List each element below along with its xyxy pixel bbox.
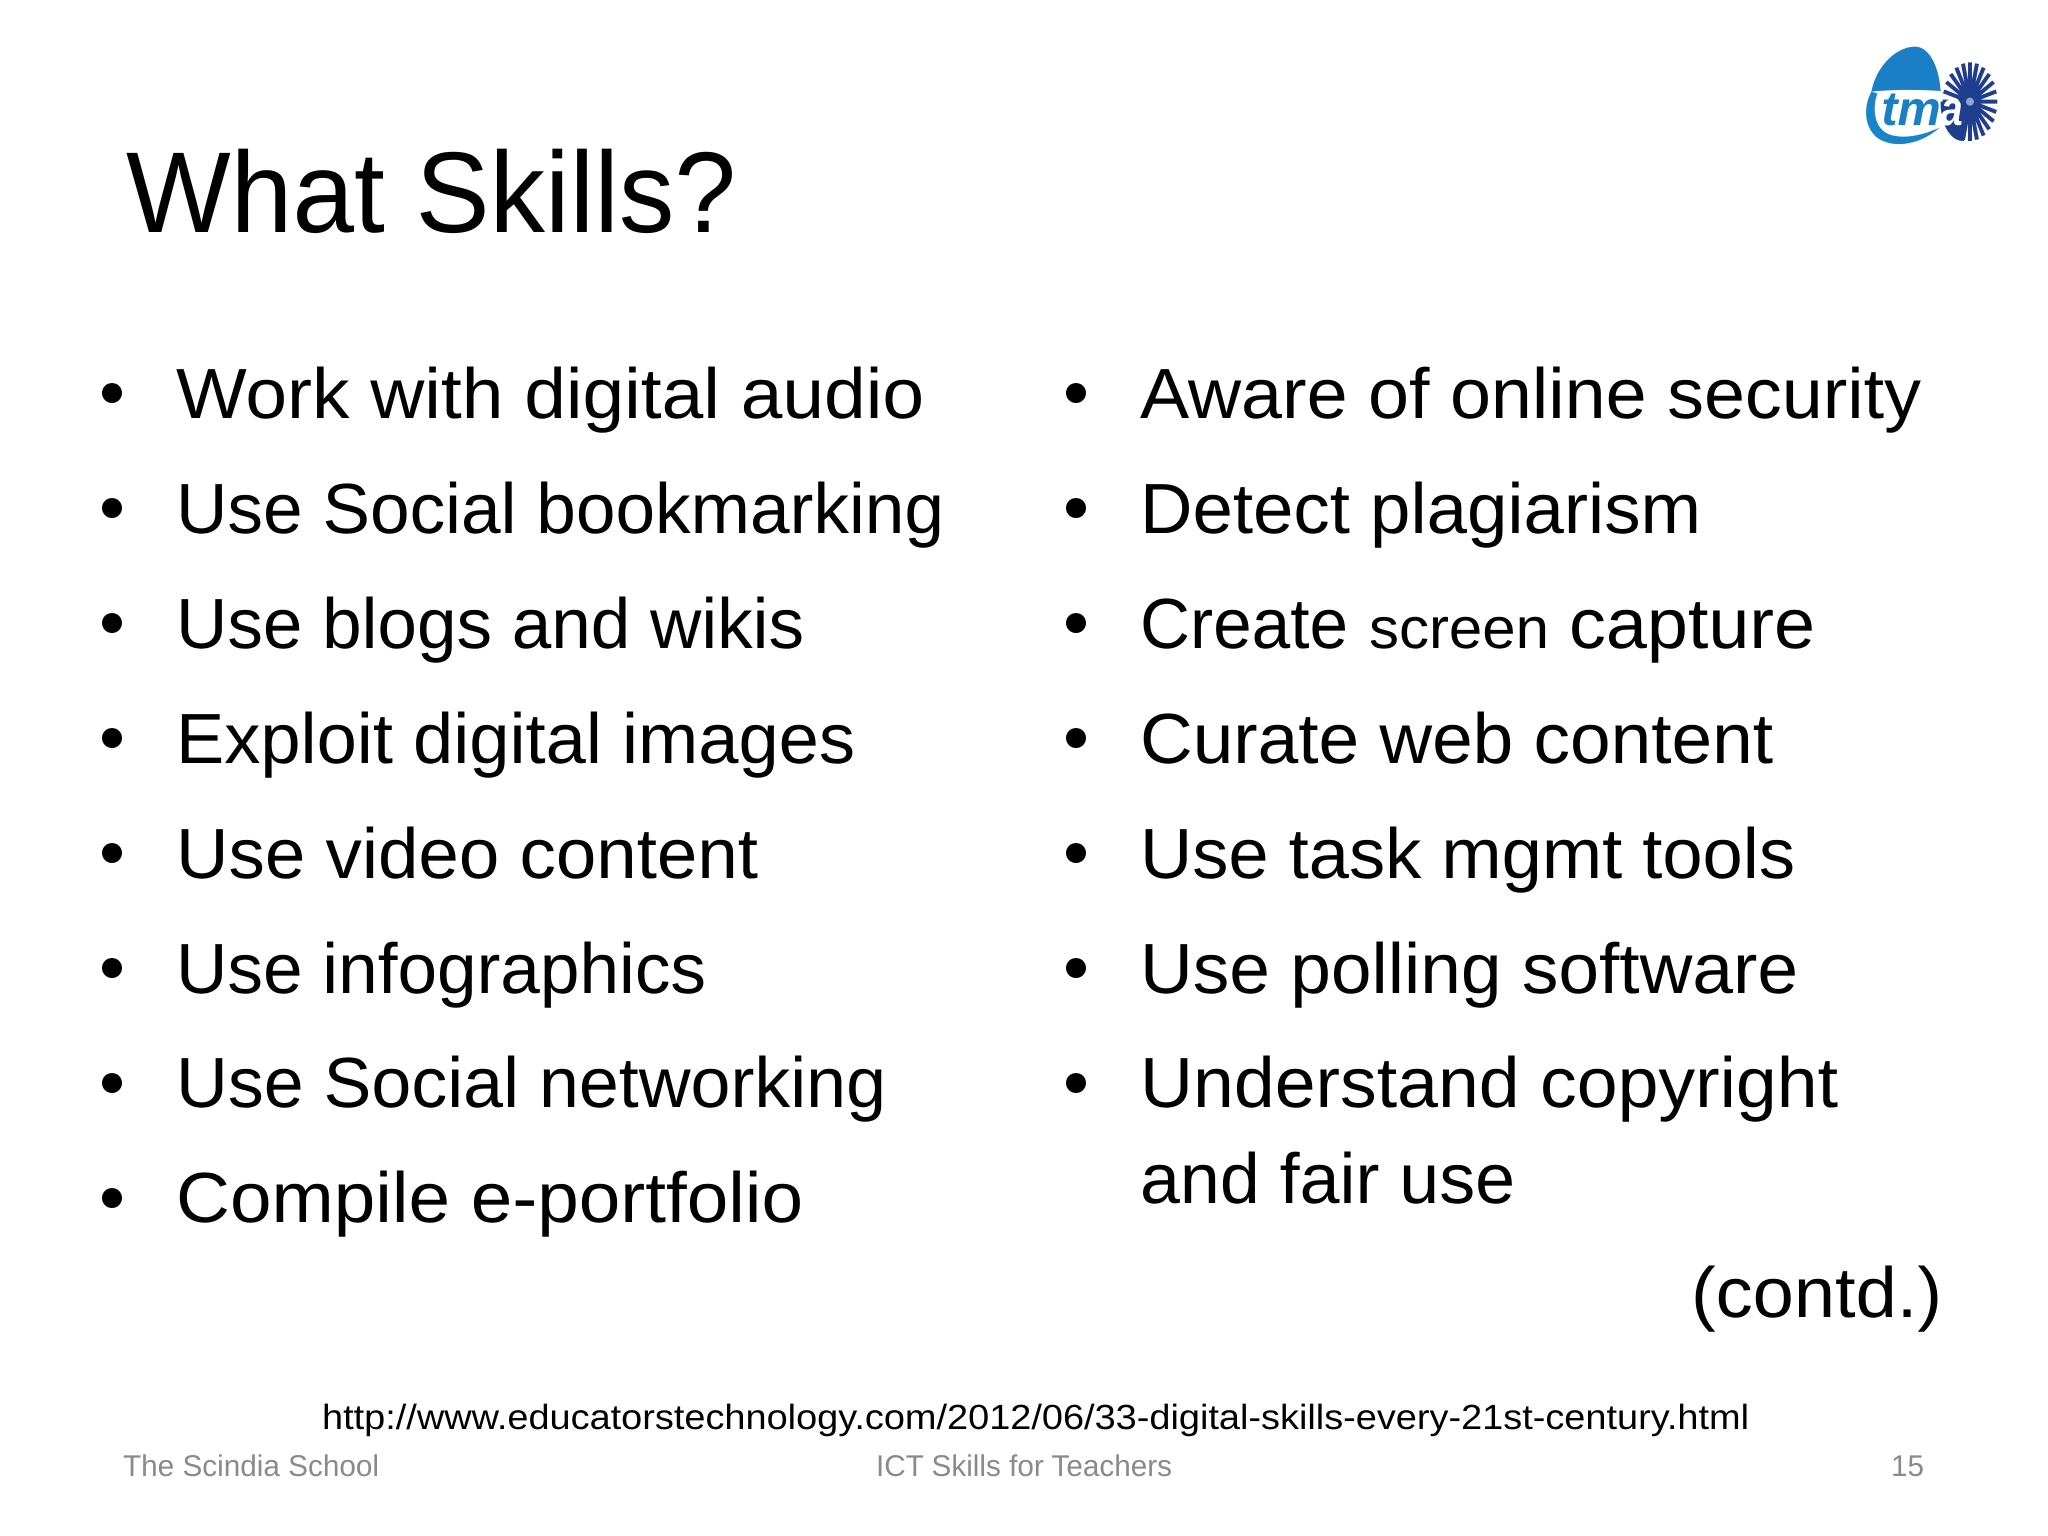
- skill: Detect plagiarism: Detect plagiarism: [1140, 470, 1701, 549]
- source URL: http://www.educatorstechnology.com/2012/06/33-digital-skills-every-21st-century.html: [322, 1398, 1749, 1437]
- skill: Use infographics: Use infographics: [176, 930, 706, 1009]
- logo: blue dome: [1871, 47, 1941, 92]
- icon: tma logo: [1866, 47, 1997, 144]
- logo: tma lettering: tm: [1881, 81, 1941, 135]
- skill: Curate web content: Curate web content: [1140, 700, 1773, 779]
- title: What Skills?: [126, 129, 736, 257]
- footer: [123, 1450, 1924, 1483]
- skill: Use video content: Use video content: [176, 815, 758, 894]
- skill: Use task mgmt tools: Use task mgmt tools: [1140, 815, 1795, 894]
- skill: Create screen capture: [1066, 585, 1815, 664]
- skill: Use Social bookmarking: Use Social bookmarking: [176, 470, 944, 549]
- footer: presentation title: ICT Skills for Teachers: [876, 1450, 1172, 1483]
- logo: lower ring: [1866, 92, 1940, 144]
- skill: Understand copyright and fair use: [1066, 1044, 1838, 1219]
- panel: left skills list: [102, 355, 944, 1238]
- logo: sunburst: [1941, 62, 1997, 141]
- footer: school name: The Scindia School: [123, 1450, 379, 1483]
- footer: slide number: 15: [1891, 1450, 1924, 1483]
- skill: Compile e-portfolio: Compile e-portfolio: [176, 1159, 803, 1238]
- skill: Work with digital audio: Work with digital audio: [176, 355, 924, 434]
- skill: Create screen capture: Create: [1140, 585, 1348, 664]
- skill: Use blogs and wikis: Use blogs and wikis: [176, 585, 804, 664]
- logo: tma lettering: a: [1941, 81, 1963, 135]
- skill: Aware of online security: Aware of online security: [1140, 355, 1922, 434]
- skill: Understand copyright and fair use: and fair use: [1140, 1140, 1515, 1219]
- skill: Understand copyright and fair use: Understand copyright: [1140, 1044, 1838, 1123]
- skill: Create screen capture: capture: [1569, 585, 1815, 664]
- skill: Exploit digital images: Exploit digital images: [176, 700, 855, 779]
- skill: Create screen capture: screen: [1369, 596, 1549, 661]
- panel: right skills list: [1066, 355, 1942, 1333]
- skill: Use polling software: Use polling software: [1140, 930, 1798, 1009]
- skill: Use Social networking: Use Social networking: [176, 1044, 886, 1123]
- continued note: (contd.): [1691, 1254, 1942, 1333]
